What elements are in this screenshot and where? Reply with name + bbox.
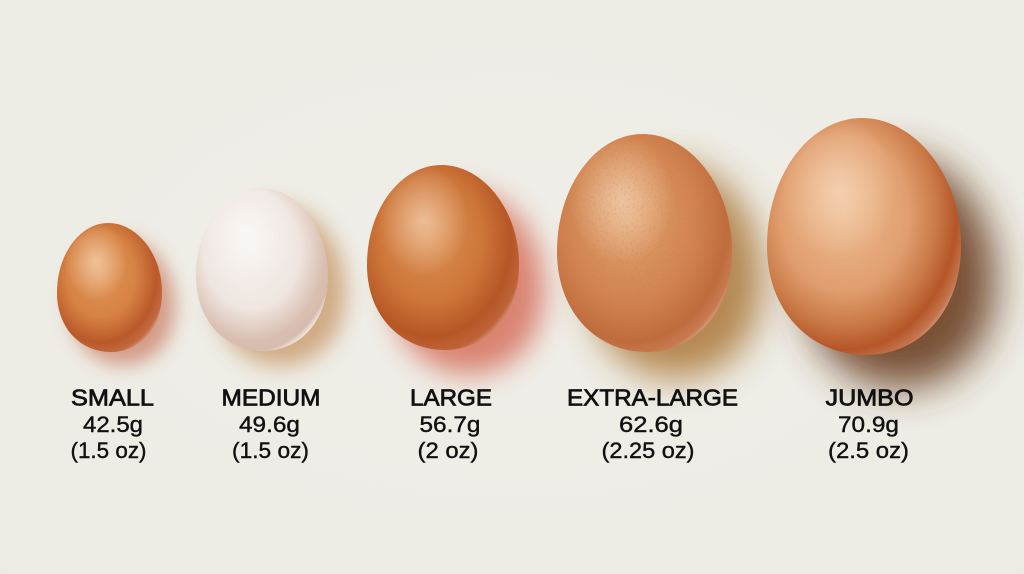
label: jumbo: (2.5 oz) (828, 438, 909, 463)
label: small: (1.5 oz) (70, 438, 146, 463)
label: extra-large: (2.25 oz) (602, 438, 694, 463)
egg: small (57, 223, 175, 365)
label: medium: (1.5 oz) (232, 438, 309, 463)
label: jumbo (826, 384, 914, 463)
label: small: SMALL (71, 384, 154, 410)
label: jumbo: 70.9g (838, 412, 899, 437)
label: extra-large: 62.6g (619, 412, 683, 437)
label: small (70, 384, 154, 463)
egg: jumbo (767, 118, 996, 388)
egg: large (367, 165, 544, 374)
label: medium: MEDIUM (222, 384, 320, 410)
label: extra-large: EXTRA-LARGE (567, 384, 738, 410)
label: large: (2 oz) (418, 438, 478, 463)
egg: medium (196, 188, 346, 366)
label: large: 56.7g (420, 412, 480, 437)
label: small: 42.5g (83, 412, 143, 437)
label: medium: 49.6g (239, 412, 300, 437)
label: jumbo: JUMBO (826, 384, 914, 410)
label: large: LARGE (410, 384, 492, 410)
label: extra-large (567, 384, 738, 463)
label: medium (222, 384, 320, 463)
label: large (410, 384, 492, 463)
egg: extra-large (557, 134, 763, 378)
